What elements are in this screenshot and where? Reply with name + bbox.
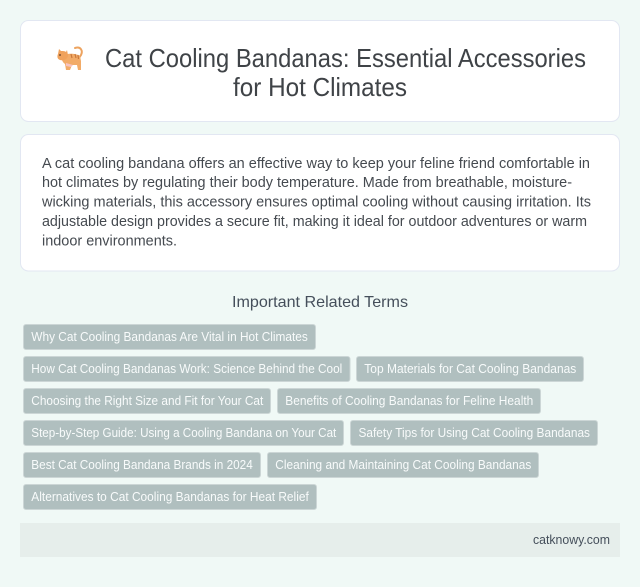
title text: Cat Cooling Bandanas: Essential Accessories: [105, 45, 586, 73]
icon: cat: [57, 48, 82, 70]
tag: why vital: Why Cat Cooling Bandanas Are Vital in Hot Climates: [31, 330, 308, 344]
tag: size and fit: Choosing the Right Size and Fit for Your Cat: [31, 394, 264, 408]
title text: for Hot Climates: [233, 74, 407, 102]
footer: [20, 523, 620, 557]
tag: step by step: Step-by-Step Guide: Using a Cooling Bandana on Your Cat: [31, 426, 337, 440]
tag: why vital: [24, 324, 316, 350]
tag: how they work: [24, 356, 350, 382]
description text: adjustable design provides a secure fit, making it ideal for outdoor adventures or warm: [42, 214, 587, 230]
title text: [105, 45, 586, 102]
description text: indoor environments.: [42, 234, 177, 250]
tag: top materials: Top Materials for Cat Cooling Bandanas: [364, 362, 576, 376]
tag list: [24, 324, 598, 510]
tag: alternatives: Alternatives to Cat Cooling Bandanas for Heat Relief: [31, 490, 309, 504]
tag: how they work: How Cat Cooling Bandanas Work: Science Behind the Cool: [31, 362, 342, 376]
footer source text: catknowy.com: [533, 532, 610, 547]
tag: cleaning: Cleaning and Maintaining Cat Cooling Bandanas: [275, 458, 531, 472]
tag: safety tips: [350, 420, 598, 446]
tag: benefits: [278, 388, 540, 414]
panel: title card: [20, 20, 620, 122]
description text: hot climates by regulating their body temperature. Made from breathable, moisture-: [42, 175, 572, 191]
tag: best brands: Best Cat Cooling Bandana Brands in 2024: [31, 458, 253, 472]
tag: alternatives: [24, 484, 316, 510]
tag: safety tips: Safety Tips for Using Cat Cooling Bandanas: [358, 426, 590, 440]
panel: description card: [20, 134, 620, 271]
tag: step by step: [24, 420, 344, 446]
tag: cleaning: [268, 452, 538, 478]
heading: important related terms: Important Related Terms: [232, 294, 408, 311]
tag: size and fit: [24, 388, 270, 414]
tag: top materials: [356, 356, 584, 382]
tag: best brands: [24, 452, 260, 478]
description text: A cat cooling bandana offers an effective way to keep your feline friend comfortable in: [42, 156, 590, 172]
tag: benefits: Benefits of Cooling Bandanas for Feline Health: [285, 394, 533, 408]
description text: wicking materials, this accessory ensures optimal cooling without causing irritation. Its: [41, 194, 591, 210]
description text: [41, 156, 591, 250]
